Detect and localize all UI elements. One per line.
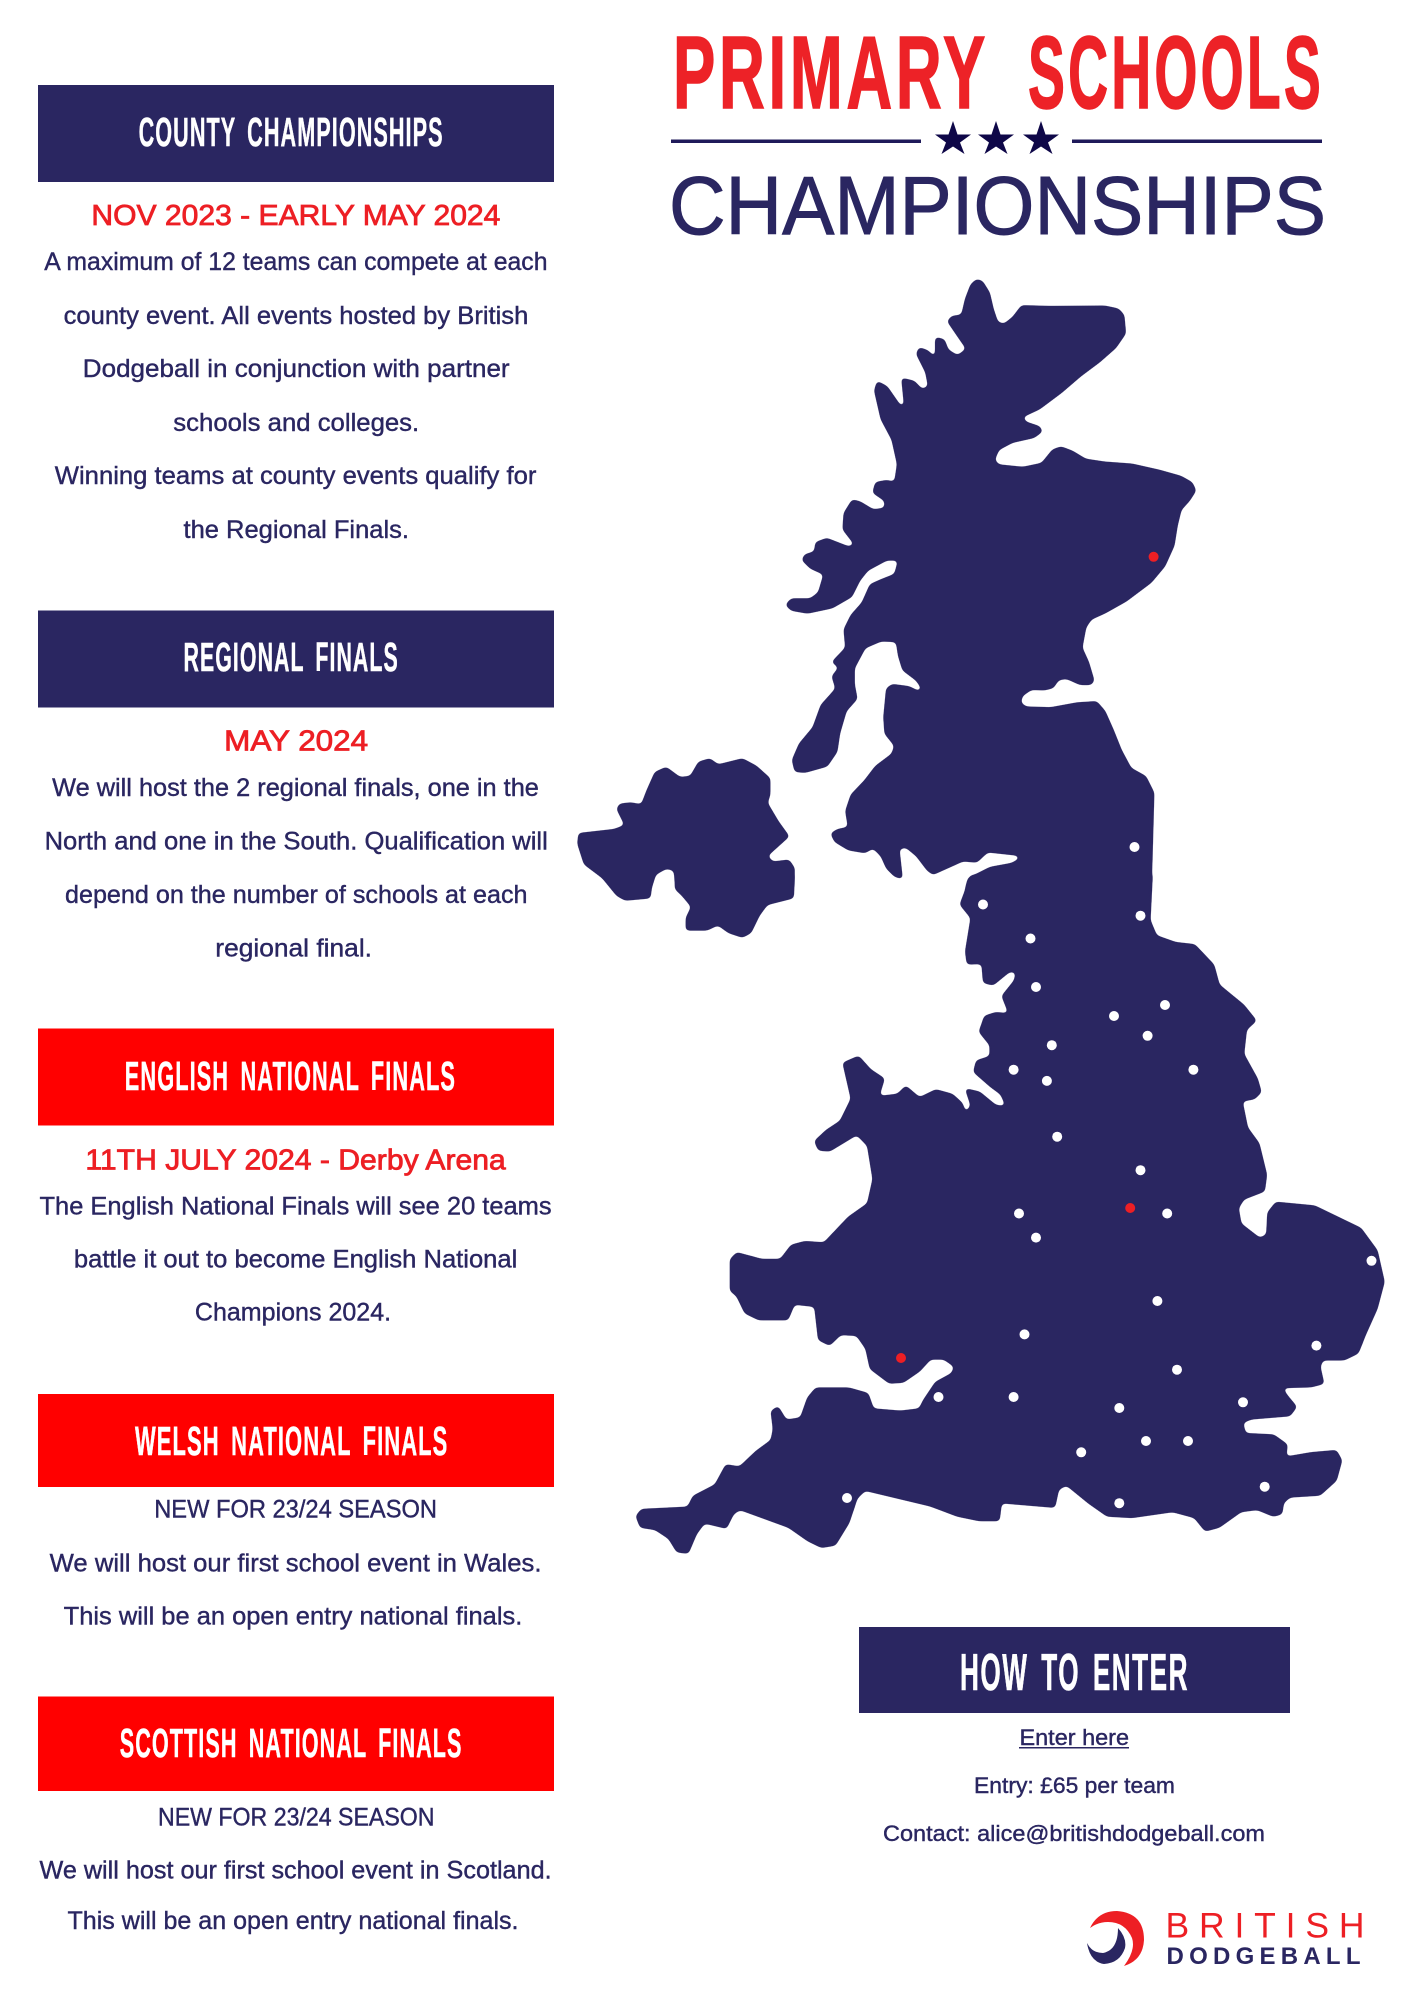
text block: welsh national finals: NEW FOR 23/24 SEASON — [154, 1496, 437, 1524]
date: county championships: NOV 2023 - EARLY MAY 2024 — [91, 200, 500, 232]
text: contact: Contact: alice@britishdodgeball.com — [883, 1821, 1265, 1846]
text block: scottish national finals: This will be an open entry national finals. — [68, 1907, 518, 1935]
text block: welsh national finals — [50, 1496, 541, 1630]
map landmass: Great Britain and Northern Ireland — [578, 280, 1384, 1553]
panel: english national finals — [38, 1028, 554, 1326]
heading bar: county championships — [38, 85, 554, 182]
icon: swoosh ball — [1087, 1911, 1144, 1966]
text: entry fee: Entry: £65 per team — [974, 1773, 1175, 1798]
text block: county championships: A maximum of 12 teams can compete at each — [44, 248, 548, 276]
text block: regional finals: regional final. — [215, 934, 372, 962]
heading bar: regional finals: REGIONAL FINALS — [184, 634, 399, 680]
heading bar: regional finals — [38, 610, 554, 708]
title line: championships: CHAMPIONSHIPS — [669, 159, 1326, 252]
title — [669, 15, 1326, 252]
text block: county championships: the Regional Finals. — [184, 516, 409, 544]
wordmark: dodgeball: DODGEBALL — [1166, 1943, 1360, 1970]
text block: scottish national finals: NEW FOR 23/24 SEASON — [158, 1804, 434, 1832]
date: regional finals: MAY 2024 — [224, 726, 368, 758]
heading bar: how to enter: HOW TO ENTER — [960, 1644, 1189, 1702]
title line: primary schools: PRIMARY — [673, 15, 989, 130]
logo: British Dodgeball — [1087, 1906, 1364, 1970]
text block: county championships: schools and colleges. — [173, 409, 419, 437]
text block: english national finals: Champions 2024. — [195, 1298, 391, 1326]
text block: welsh national finals: We will host our first school event in Wales. — [50, 1550, 541, 1578]
text block: county championships: county event. All events hosted by British — [64, 302, 528, 330]
venue dots: white — [842, 842, 1376, 1508]
heading bar: scottish national finals: SCOTTISH NATIONAL FINALS — [120, 1720, 463, 1766]
heading bar: english national finals — [38, 1028, 554, 1126]
link: enter here: Enter here — [1020, 1725, 1129, 1750]
heading bar: welsh national finals: WELSH NATIONAL FINALS — [135, 1418, 448, 1464]
heading bar: english national finals: ENGLISH NATIONAL FINALS — [125, 1053, 456, 1099]
heading bar: how to enter — [859, 1627, 1290, 1713]
venue dots: red — [896, 552, 1159, 1363]
text block: scottish national finals: We will host our first school event in Scotland. — [40, 1856, 552, 1884]
text block: county championships — [44, 248, 548, 544]
text block: regional finals: We will host the 2 regional finals, one in the — [52, 774, 539, 802]
divider with three stars — [671, 121, 1322, 154]
text block: english national finals — [40, 1192, 552, 1326]
panel: how to enter — [859, 1627, 1290, 1846]
wordmark: british: BRITISH — [1166, 1906, 1364, 1946]
text block: welsh national finals: This will be an open entry national finals. — [64, 1602, 522, 1630]
date: english national finals: 11TH JULY 2024 - Derby Arena — [85, 1144, 507, 1176]
panel: county championships — [38, 85, 554, 544]
heading bar: county championships: COUNTY CHAMPIONSHIPS — [139, 109, 444, 155]
text block: scottish national finals — [40, 1804, 552, 1935]
map of the UK with venue dots — [578, 280, 1384, 1553]
text block: regional finals: depend on the number of schools at each — [65, 881, 528, 909]
panel: regional finals — [38, 610, 554, 962]
panel: scottish national finals — [38, 1696, 554, 1935]
text block: regional finals: North and one in the South. Qualification will — [45, 828, 548, 856]
panel: welsh national finals — [38, 1394, 554, 1630]
heading bar: scottish national finals — [38, 1696, 554, 1791]
text block: english national finals: battle it out to become English National — [74, 1246, 517, 1274]
text block: county championships: Dodgeball in conjunction with partner — [83, 355, 510, 383]
text block: english national finals: The English National Finals will see 20 teams — [40, 1192, 552, 1220]
text block: regional finals — [45, 774, 548, 962]
text block: county championships: Winning teams at county events qualify for — [55, 462, 536, 490]
heading bar: welsh national finals — [38, 1394, 554, 1487]
